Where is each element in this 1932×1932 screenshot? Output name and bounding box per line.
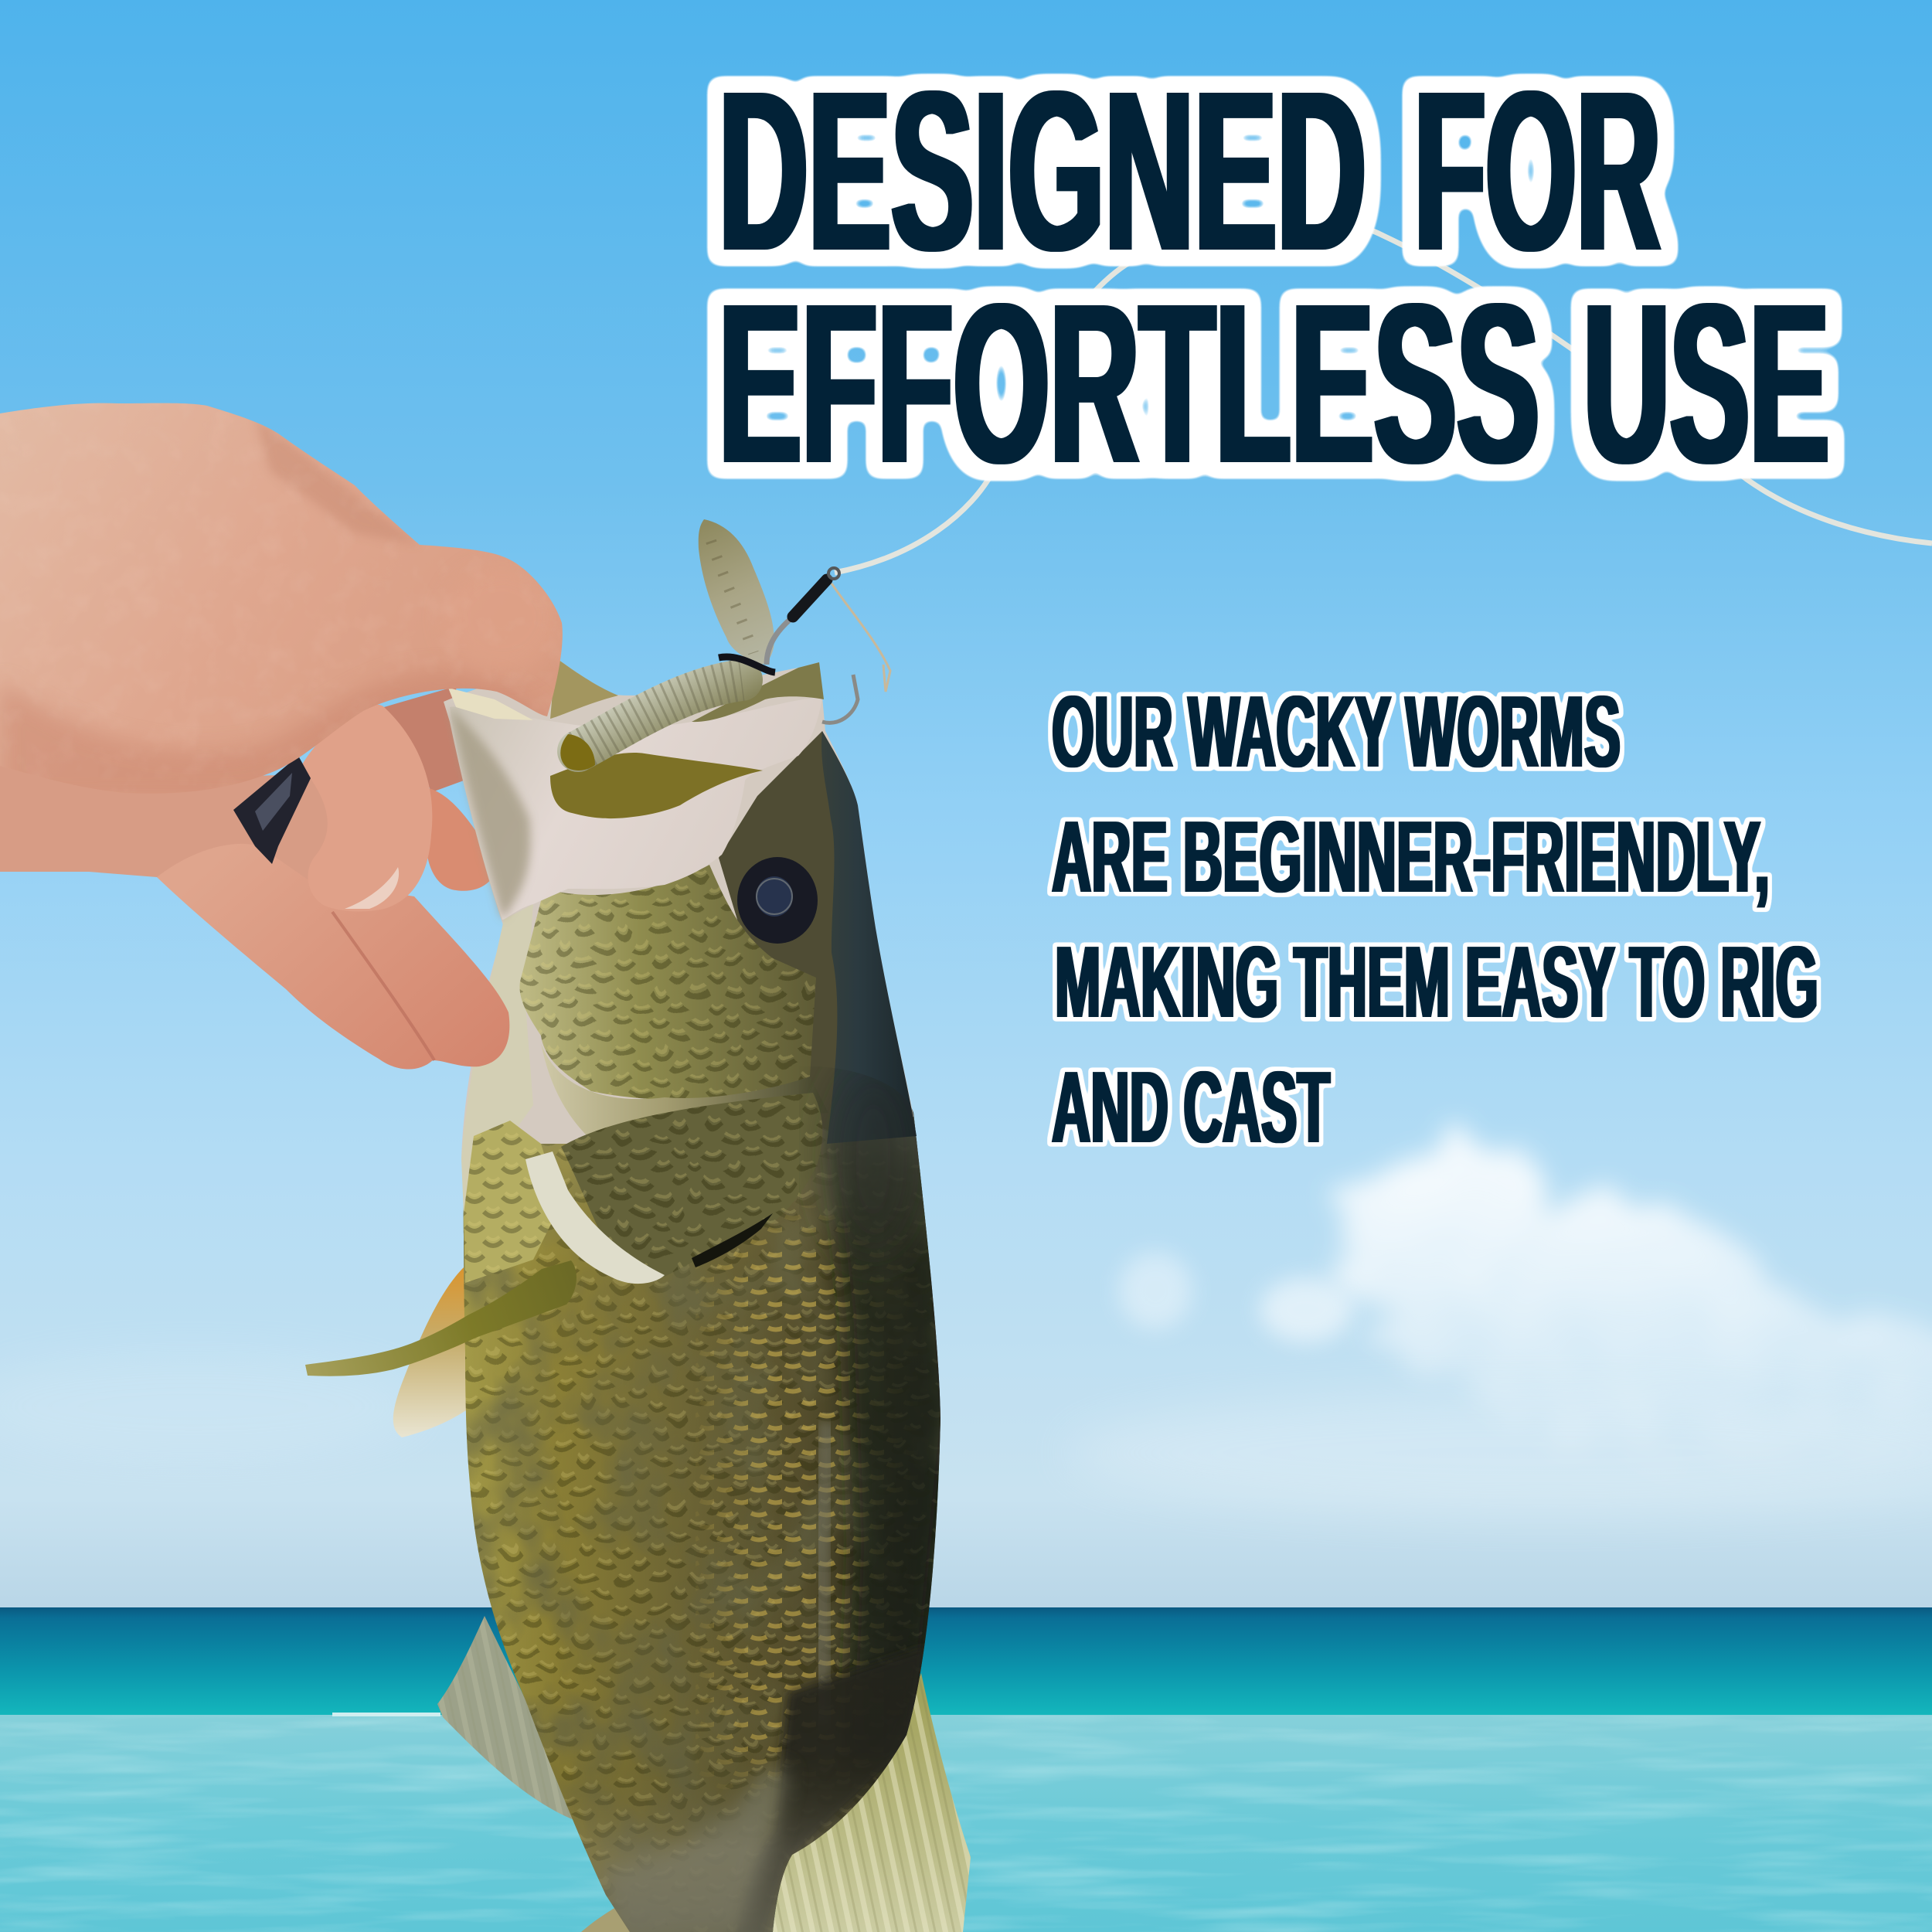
skin texture [0,386,587,819]
dark head top [821,731,917,1144]
gill shadow [692,1213,773,1267]
body scales [464,1111,940,1907]
title line 1 word 1: DESIGNED [719,43,1366,298]
hand shading [0,386,587,819]
main body [464,1066,940,1932]
dorsal shadow [819,1066,951,1770]
operculum [561,1093,822,1277]
cheek scales [519,865,816,1101]
worm ribbed body [578,680,742,751]
shallow foreground water [0,1713,1932,1932]
cloud mass [1342,1143,1932,1461]
tail fin [773,1673,971,1932]
thumb blush [444,564,560,672]
back of hand [0,403,563,794]
body texture [464,1109,940,1932]
body copy [1052,675,1818,1164]
light grey underside [603,1770,788,1932]
jaw silver shading [450,707,530,920]
pectoral fin [305,1260,577,1376]
upper head silhouette [444,658,913,1159]
low haze [1066,1391,1932,1515]
cheek texture [510,858,827,1113]
upper mouth flap [550,658,618,719]
white lower jaw side [461,904,533,1213]
eye [737,857,818,944]
gill cover crease [541,1043,828,1136]
eye surround [719,731,845,1136]
nape shadow blending head into body [827,1059,920,1260]
gill membrane [526,1151,665,1284]
small cloud left [1118,1252,1192,1329]
bent index finger [301,705,432,911]
belly gold speckle [464,1121,560,1283]
operculum texture [549,1082,835,1291]
line 4: AND CAST [1052,1050,1330,1164]
hook shank [767,614,796,665]
tag line [832,583,890,692]
hook point [822,675,858,723]
hand: fingers behind the fish [0,686,497,920]
olive upper lip [692,662,824,722]
deep rear finger [384,686,464,792]
lower left fin [437,1616,576,1821]
upper knuckle plane [255,417,420,545]
ventral fin [393,1267,471,1437]
clouds [0,1143,1932,1515]
open mouth membrane [450,697,822,920]
distant sea band [0,1607,1932,1717]
small cloud middle [1260,1277,1352,1342]
small bottom fin [581,1903,641,1932]
white tissue strip [448,688,533,720]
olive inner mouth [550,753,763,818]
rear finger [427,788,497,891]
black o-ring [719,657,775,672]
mottling [464,1144,940,1856]
fingernail [345,867,399,909]
ring [233,756,311,864]
finger divide [332,912,434,1060]
wrist and lower hand [0,761,348,920]
lateral line [821,1422,828,1723]
worm upper tail [699,519,774,665]
title [719,43,1829,511]
lower right dark belly [734,1646,927,1932]
title line 1 word 2: FOR [1414,43,1661,298]
worm tip [560,734,595,770]
long lower finger [157,844,509,1070]
fish [305,519,971,1932]
palm shadow [0,670,547,804]
hand: palm, thumb and fingers in front [0,386,587,1070]
fishing line [835,215,1932,573]
haze left [0,1352,425,1461]
black sleeve [793,580,827,617]
swivel ring [828,568,839,579]
body vertical tint [433,1066,958,1932]
golden scale flecks [696,1206,896,1788]
